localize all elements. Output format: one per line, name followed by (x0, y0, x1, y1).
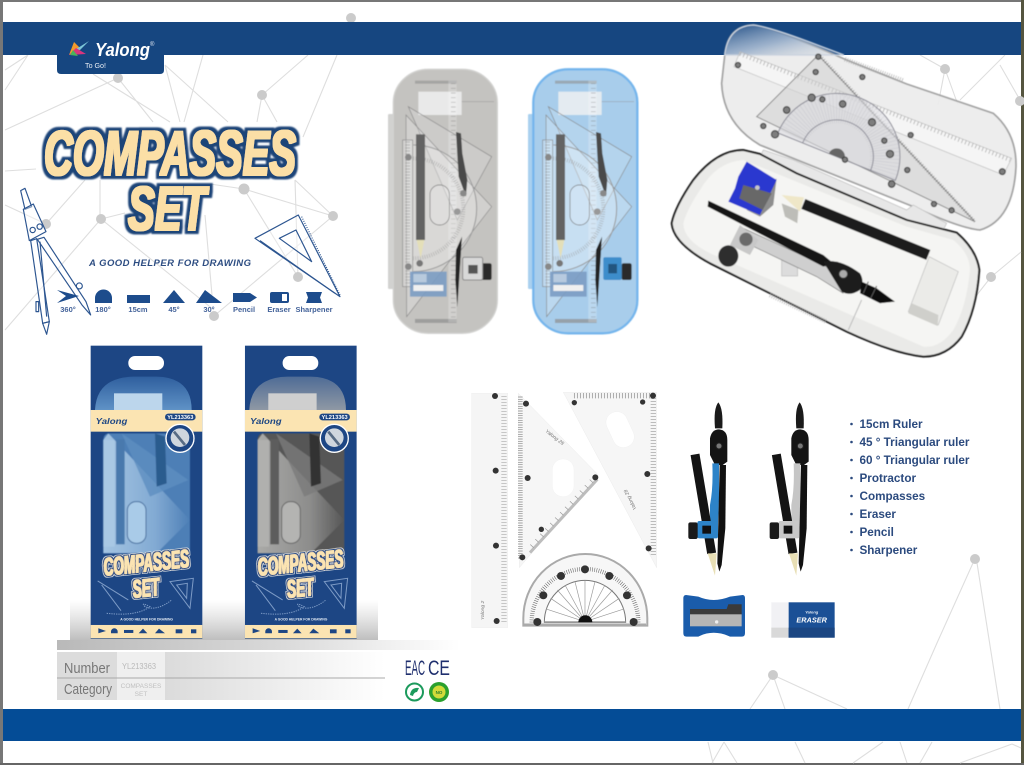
top band (3, 22, 1021, 55)
certification marks (405, 657, 450, 702)
icon: 180 protractor (95, 290, 112, 303)
logo tab (57, 40, 164, 74)
45 degree triangle (518, 393, 598, 568)
eraser: Yalong (805, 610, 819, 615)
compass: silver (770, 402, 809, 576)
blister card: blue (91, 346, 202, 639)
card window (258, 433, 344, 553)
logo wordmark: Yalong (95, 40, 150, 60)
icon: eraser (270, 292, 289, 303)
certification marks: EAC (405, 657, 425, 680)
card cream strip (91, 410, 202, 432)
list item: Sharpener (860, 544, 918, 557)
value: category: SET (135, 691, 147, 698)
icon: sharpener (306, 292, 322, 303)
logo tagline: To Go! (85, 61, 106, 70)
lid set square edge (820, 56, 975, 222)
card title: COMPASSES (102, 545, 191, 582)
illustration: compass outline (21, 188, 91, 334)
icon: recycling mark (406, 684, 423, 700)
sharpener (728, 162, 777, 217)
icon labels (60, 305, 333, 314)
15cm ruler (472, 393, 508, 628)
icon labels: 30° (203, 305, 215, 314)
pencil (782, 195, 928, 255)
card dome (95, 377, 192, 410)
card cream strip (245, 410, 357, 432)
card title (256, 545, 348, 607)
icon: 15cm ruler (127, 295, 150, 303)
card line art (98, 578, 193, 614)
card title: SET (131, 573, 162, 604)
title line 2: SET (128, 175, 209, 244)
lid protractor (778, 74, 919, 180)
card model number: YL213363 (167, 415, 193, 421)
card hang hole (283, 356, 318, 370)
title (44, 119, 296, 244)
60 degree triangle: Yalong 28 (623, 488, 638, 511)
list item: 45 ° Triangular ruler (860, 436, 970, 449)
shelf (57, 640, 460, 650)
lid ruler (734, 52, 1012, 175)
bottom band (3, 709, 1021, 741)
icon labels: Sharpener (295, 305, 333, 314)
case base (672, 150, 979, 357)
card shadows (70, 600, 378, 640)
eraser: ERASER (796, 615, 828, 624)
icon: non-toxic mark: NO (436, 690, 443, 695)
blister card: gray (245, 346, 357, 639)
value: category: COMPASSES (121, 683, 162, 690)
60 degree triangle (563, 392, 657, 568)
card bottom icon strip (91, 625, 202, 638)
card line art (252, 578, 348, 614)
list item: Compasses (860, 490, 926, 503)
gray pencil case (388, 69, 497, 333)
icon labels: 180° (95, 305, 111, 314)
open pencil case photo (672, 25, 1016, 357)
card window (103, 433, 190, 553)
compass and stationery (683, 402, 835, 638)
card title: COMPASSES (256, 545, 345, 582)
label: number: Number (64, 660, 110, 677)
card logo: Yalong (250, 416, 282, 426)
sharpener (683, 595, 745, 637)
card title (102, 545, 193, 607)
icon: 360 compass (57, 290, 79, 303)
list item: Protractor (860, 472, 916, 485)
card hang hole (128, 356, 164, 370)
case hinge (760, 150, 947, 230)
value: category (121, 683, 162, 698)
icon: pencil (233, 293, 257, 302)
product info table (57, 652, 385, 700)
card badge (320, 424, 348, 452)
value: number: YL213363 (122, 662, 157, 671)
card tagline: A GOOD HELPER FOR DRAWING (120, 618, 173, 622)
card model number: YL213363 (322, 415, 348, 421)
list item: Pencil (860, 526, 894, 539)
list item: Eraser (860, 508, 896, 521)
lid rivets (735, 54, 1005, 213)
card tagline: A GOOD HELPER FOR DRAWING (275, 618, 328, 622)
compass in case (708, 201, 895, 303)
icon: 30 triangle (196, 290, 222, 303)
illustration: set square outline (255, 215, 340, 297)
icon labels: Pencil (233, 305, 255, 314)
icon: 45 triangle (163, 290, 185, 303)
45 degree triangle: Yalong 28 (544, 429, 565, 447)
title line 1: COMPASSES (44, 119, 296, 189)
flat ruler set (472, 392, 657, 628)
list item: 15cm Ruler (860, 418, 923, 431)
list item: 60 ° Triangular ruler (860, 454, 970, 467)
compass: blue (688, 402, 727, 576)
card model number (319, 414, 350, 421)
case lid (722, 25, 1016, 230)
registered mark: ® (150, 41, 155, 48)
label: category: Category (64, 681, 112, 698)
icon labels: 45° (168, 305, 180, 314)
card dome (249, 377, 346, 410)
icon: colourful bird logo (69, 41, 89, 56)
blue pencil case (528, 69, 637, 333)
protractor (523, 554, 647, 626)
card logo: Yalong (96, 416, 128, 426)
eraser (771, 602, 835, 638)
subtitle: A GOOD HELPER FOR DRAWING (88, 258, 252, 269)
icon labels: 360° (60, 305, 76, 314)
card bottom icon strip (245, 625, 357, 638)
card title: SET (286, 573, 316, 604)
contents list (850, 418, 970, 557)
icon row: set contents (57, 290, 333, 314)
lid triangle (757, 55, 975, 222)
mark: CE: CE (428, 657, 450, 680)
icon labels: Eraser (267, 305, 291, 314)
bullets (850, 423, 853, 551)
eraser in case (908, 257, 958, 326)
icon labels: 15cm (128, 305, 148, 314)
card model number (165, 414, 196, 421)
card badge (166, 424, 194, 452)
15cm ruler: Yalong 2 (480, 600, 486, 620)
